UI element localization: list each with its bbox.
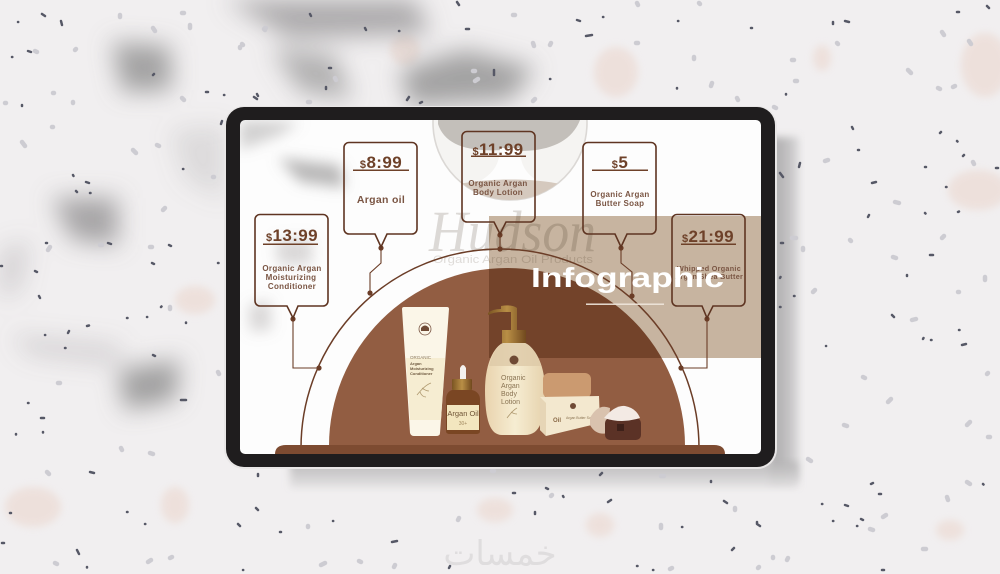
title underline <box>586 304 664 305</box>
product: soap and box: Oil <box>553 418 561 424</box>
tablet screen <box>240 120 761 454</box>
callout: butter soap <box>583 142 656 247</box>
callout: body lotion: $11:99 <box>472 140 524 159</box>
connector lines <box>293 235 707 368</box>
product: argan oil bottle: Argan Oil <box>447 409 479 418</box>
connector dots <box>290 232 710 371</box>
callout: body lotion: Organic Argan <box>468 179 528 188</box>
product: soap and box <box>540 373 600 436</box>
callout: argan oil: $8:99 <box>360 153 402 172</box>
callout: butter soap: $5 <box>612 153 628 172</box>
callout: conditioner <box>255 214 328 318</box>
callout: body lotion: Body Lotion <box>473 188 523 197</box>
product: conditioner tube: Argan <box>410 361 422 366</box>
product: body lotion bottle: Argan <box>501 383 520 390</box>
watermark Hudson wordmark: Hudson <box>428 199 596 264</box>
product: conditioner tube <box>402 307 449 436</box>
product: conditioner tube: Moisturizing <box>410 366 434 371</box>
brown semicircle <box>329 268 685 445</box>
callout: conditioner: Organic Argan <box>262 264 322 273</box>
tablet drop shadow right <box>770 137 799 482</box>
callout: conditioner: $13:99 <box>266 226 318 245</box>
product: body lotion bottle <box>485 305 545 435</box>
callout: whipped butter: $21:99 <box>682 227 734 246</box>
product: conditioner tube: Conditioner <box>410 371 433 376</box>
product: body lotion bottle: Lotion <box>501 399 520 406</box>
tablet body and rim <box>224 106 777 469</box>
title: Infographic <box>531 262 724 293</box>
tablet drop shadow bottom <box>290 462 798 488</box>
callout: whipped butter <box>672 214 745 318</box>
callout: butter soap: Butter Soap <box>596 199 644 208</box>
watermark logo <box>432 120 588 201</box>
product: soap and box: Argan Butter Soap <box>566 416 595 420</box>
product: argan oil bottle <box>446 365 480 434</box>
tablet <box>224 106 777 469</box>
outer arc <box>300 248 700 445</box>
callout: whipped butter: Argan Shea Butter <box>675 272 743 281</box>
leaf shadows <box>0 0 535 410</box>
callout: argan oil <box>344 142 417 247</box>
product: argan oil bottle: 30+ <box>459 421 467 427</box>
product: conditioner tube: ORGANIC <box>410 355 432 360</box>
screen leaf shadows <box>240 120 345 332</box>
product: whipped butter jar <box>590 406 641 440</box>
tablet bezel <box>226 107 775 467</box>
shelf <box>275 445 725 454</box>
product: body lotion bottle: Organic <box>501 375 526 382</box>
callout: body lotion <box>462 132 535 234</box>
callout: conditioner: Moisturizing <box>266 273 316 282</box>
callout: butter soap: Organic Argan <box>590 190 650 199</box>
product: body lotion bottle: Body <box>501 391 517 398</box>
beige overlay panel <box>489 216 761 358</box>
callout: conditioner: Conditioner <box>268 282 316 291</box>
callout: whipped butter: Whipped Organic <box>677 264 741 273</box>
watermark tagline: Organic Argan Oil Products <box>433 254 594 266</box>
callout: argan oil: Argan oil <box>357 194 405 206</box>
